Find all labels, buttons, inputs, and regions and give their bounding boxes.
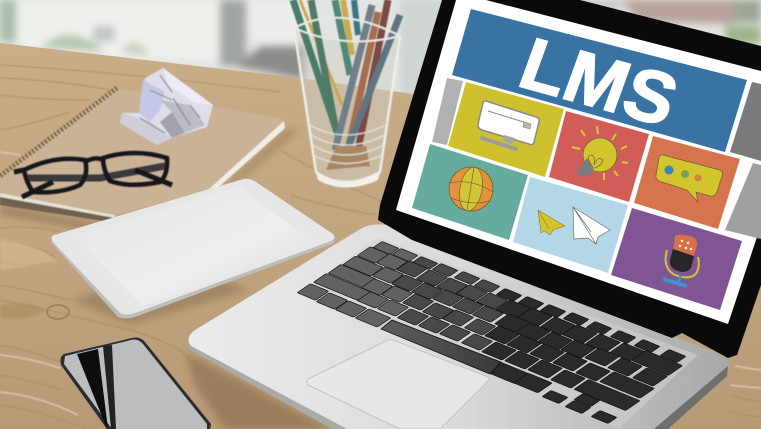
icon: monitor (478, 101, 539, 149)
spacebar (381, 320, 501, 374)
panel: orange chat (634, 136, 740, 229)
keyboard keys (297, 241, 686, 424)
heading: LMS: LMS (510, 22, 688, 142)
icon: microphone (663, 235, 699, 286)
panel: teal globe (412, 144, 528, 240)
icon: speech bubble (656, 155, 723, 202)
icon: yellow paper plane (538, 210, 565, 235)
crumpled paper ball (120, 68, 213, 145)
panel: yellow monitor (448, 82, 564, 177)
panel: light blue paper planes (513, 177, 628, 273)
grey side tab right top (730, 82, 761, 161)
LMS screen (396, 0, 761, 324)
icon: globe (449, 165, 493, 213)
icon: light bulb (572, 126, 628, 180)
panel: red idea (549, 111, 649, 202)
blurred window background (0, 0, 761, 100)
blue header panel (452, 9, 747, 152)
tablet (52, 179, 335, 318)
trackpad (306, 340, 489, 429)
icon: white paper plane (573, 207, 610, 244)
eyeglasses (14, 153, 172, 197)
grey side tab right bottom (725, 163, 761, 239)
screen lid bezel (378, 0, 761, 358)
laptop (187, 0, 761, 429)
glass with pencils (293, 0, 400, 188)
grey side tab left (432, 78, 463, 145)
white display (396, 0, 761, 324)
panel: purple microphone (611, 208, 742, 310)
smartphone (60, 338, 211, 429)
spiral notebook (0, 88, 285, 223)
keyboard well (297, 238, 698, 429)
laptop base (187, 224, 729, 429)
